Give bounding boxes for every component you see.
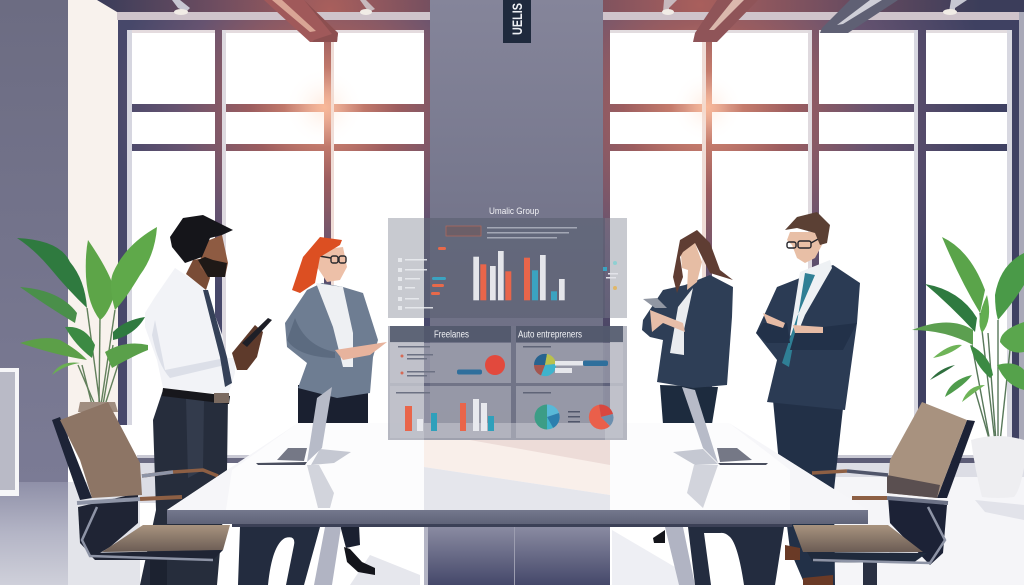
tie: [203, 290, 232, 387]
crossed arms: [756, 323, 790, 343]
belt: [162, 388, 230, 404]
glasses: [787, 238, 820, 248]
card: freelancers pie: [390, 343, 511, 383]
brown hair: [673, 230, 733, 293]
header: Auto entrepreners: [516, 326, 623, 342]
face: [317, 247, 347, 282]
face: [787, 232, 822, 263]
meeting table: [167, 423, 868, 585]
person: man with phone: [140, 215, 272, 585]
trousers: [773, 400, 843, 585]
blouse: [316, 283, 353, 367]
face and neck: [680, 243, 702, 290]
hands: [335, 342, 387, 360]
lower frame: [888, 497, 947, 565]
armrests: [142, 470, 218, 476]
hair: [170, 215, 233, 263]
jacket: [642, 275, 733, 388]
central column: [424, 0, 610, 585]
metal strut: [813, 507, 945, 563]
column sign: [503, 0, 531, 43]
plant pot: [971, 436, 1024, 498]
right legend: [603, 261, 618, 290]
left laptop: [256, 387, 332, 465]
right ceiling light: [820, 0, 898, 33]
left legend list: [398, 258, 433, 310]
card: entrepreneurs pies: [516, 386, 623, 438]
table edge: [167, 510, 868, 524]
neck and head: [186, 258, 210, 290]
table legs: [238, 527, 320, 585]
red hair: [292, 237, 342, 293]
table top: [167, 423, 867, 510]
gray jacket: [285, 283, 378, 398]
heel shoe: [344, 547, 375, 575]
ceiling and light fixtures: [97, 0, 1024, 42]
table reflections: [311, 449, 351, 465]
chair back cushion: [60, 402, 142, 498]
left potted plant: [17, 227, 157, 412]
right office chair: [793, 402, 975, 585]
person: red-haired woman: [285, 237, 387, 575]
header: Freelanes: Freelanes: [434, 328, 469, 340]
person: woman with tablet: [642, 230, 733, 543]
header: Freelanes: [390, 326, 511, 342]
jacket: [756, 265, 860, 410]
white side cabinet: [0, 368, 19, 496]
highlighted label: [446, 226, 481, 236]
right potted plant: [912, 237, 1024, 498]
chair back cushion: [887, 402, 967, 498]
lower frame: [78, 493, 138, 557]
bar chart: [473, 251, 565, 300]
hair: [785, 212, 830, 245]
person: man with crossed arms: [756, 212, 860, 585]
card: freelancers bars: [390, 386, 511, 438]
right laptop: [682, 387, 768, 465]
trousers: [140, 390, 228, 585]
header: Auto entrepreners: Auto entrepreners: [518, 328, 582, 340]
description lines: [487, 227, 577, 238]
card: entrepreneurs pie: [516, 343, 623, 383]
blouse: [670, 288, 693, 355]
panel: upper dashboard: [388, 218, 627, 318]
trousers: [660, 385, 718, 424]
side of chair back: [937, 420, 975, 498]
left ceiling light: [264, 0, 338, 42]
armrests: [812, 471, 847, 473]
trousers and lower leg: [298, 385, 368, 423]
panel: lower dashboard: [388, 326, 627, 440]
small horizontal bars: [431, 247, 446, 295]
hand and phone: [232, 325, 263, 370]
glasses: [319, 256, 346, 263]
seat cushion: [102, 525, 230, 552]
hands and tablet: [650, 310, 685, 332]
tie: [782, 273, 815, 367]
right window frame: [603, 20, 1024, 463]
side of chair back: [52, 417, 92, 500]
shirt: [790, 260, 832, 340]
center ceiling light: [693, 0, 758, 42]
metal strut: [82, 507, 213, 560]
left window frame: [118, 20, 431, 463]
white shirt: [145, 268, 235, 395]
dashboard title: Umalic Group: [489, 206, 539, 217]
seat cushion: [793, 525, 923, 552]
left office chair: [52, 402, 230, 585]
